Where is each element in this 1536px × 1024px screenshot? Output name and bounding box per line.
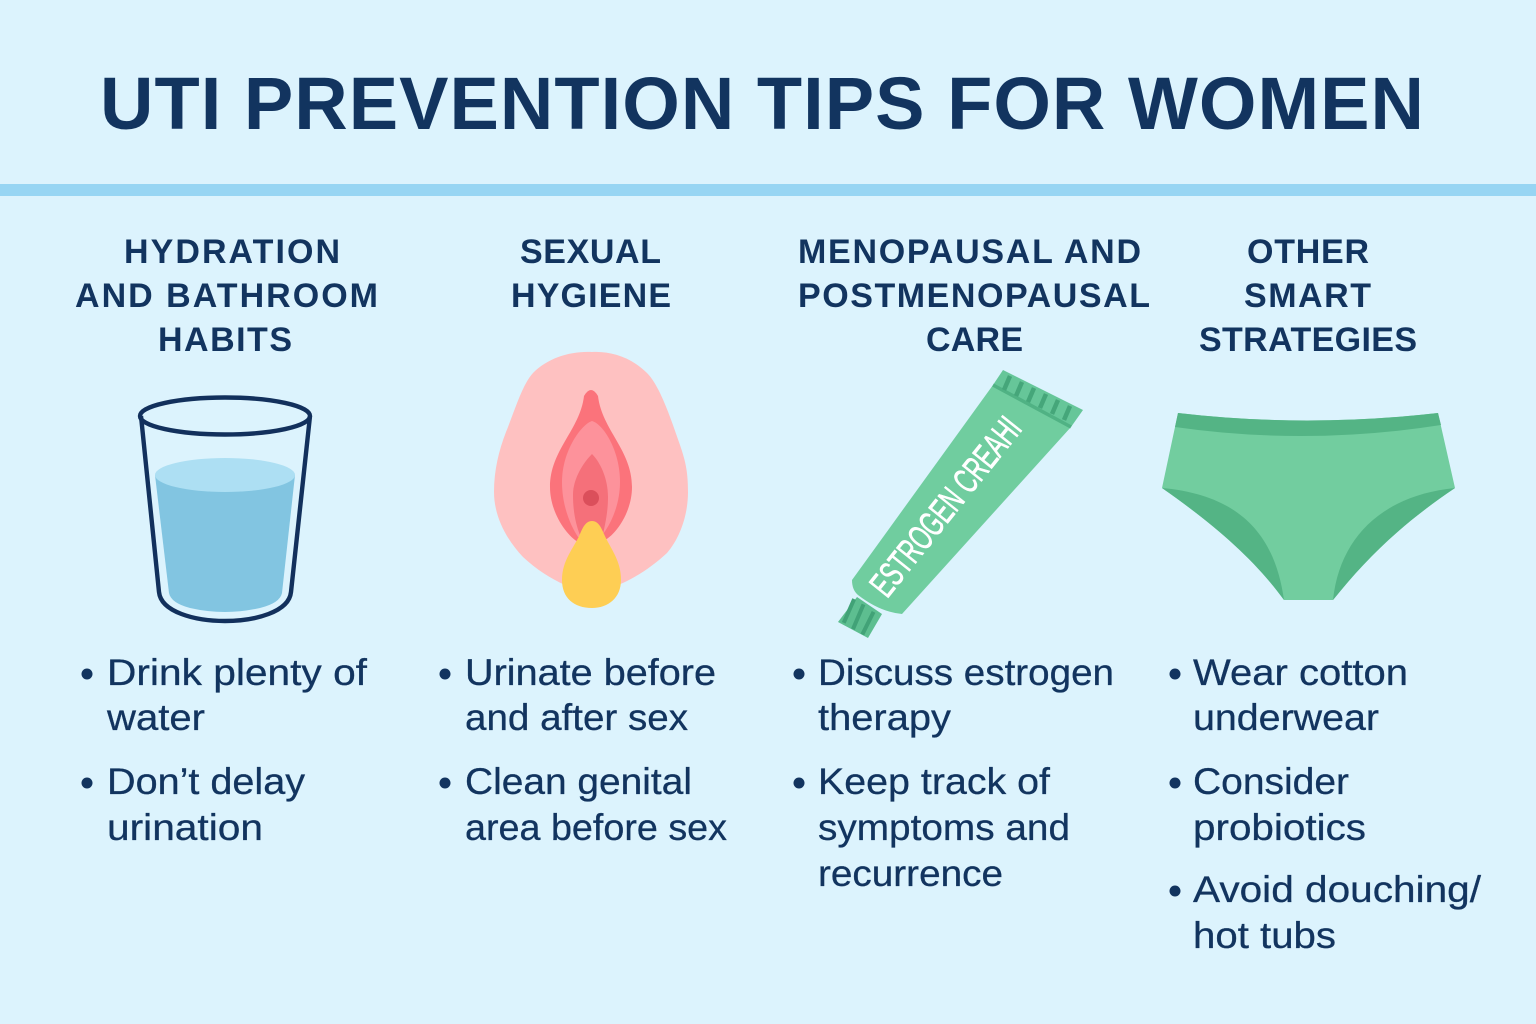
heading: hydration: AND BATHROOM bbox=[75, 277, 378, 315]
bullet list: other strategies: hot tubs bbox=[1193, 915, 1336, 956]
heading: menopausal: POSTMENOPAUSAL bbox=[798, 277, 1150, 315]
bullet list: other strategies bbox=[1170, 652, 1482, 956]
icon: estrogen cream tube bbox=[838, 370, 1083, 638]
bullet list: menopausal: therapy bbox=[818, 697, 952, 738]
bullet list: other strategies: Avoid douching/ bbox=[1193, 869, 1482, 910]
bullet list: hydration bbox=[82, 652, 368, 848]
bullet list: sexual hygiene: Clean genital bbox=[465, 761, 692, 802]
bullet list: hydration: Drink plenty of bbox=[107, 652, 368, 693]
heading: other smart strategies bbox=[1199, 233, 1417, 359]
bullet list: hydration: Don’t delay bbox=[107, 761, 306, 802]
heading: hydration: HABITS bbox=[158, 321, 292, 359]
panel: other smart strategies bbox=[1162, 233, 1482, 956]
bullet list: menopausal: recurrence bbox=[818, 853, 1003, 894]
heading: menopausal: MENOPAUSAL AND bbox=[798, 233, 1141, 271]
bullet list: menopausal bbox=[794, 652, 1114, 894]
heading: other smart strategies: SMART bbox=[1244, 277, 1371, 315]
heading: other smart strategies: OTHER bbox=[1247, 233, 1369, 271]
bullet list: sexual hygiene bbox=[440, 652, 728, 848]
bullet list: hydration: water bbox=[106, 697, 205, 738]
bullet list: sexual hygiene: Urinate before bbox=[465, 652, 716, 693]
bullet list: sexual hygiene: and after sex bbox=[465, 697, 689, 738]
heading: other smart strategies: STRATEGIES bbox=[1199, 321, 1417, 359]
heading: menopausal: CARE bbox=[926, 321, 1023, 359]
heading: sexual hygiene: HYGIENE bbox=[511, 277, 671, 315]
heading: sexual hygiene bbox=[511, 233, 671, 315]
title: UTI PREVENTION TIPS FOR WOMEN bbox=[100, 62, 1424, 145]
heading: hydration bbox=[75, 233, 378, 359]
heading: hydration: HYDRATION bbox=[124, 233, 340, 271]
bullet list: menopausal: symptoms and bbox=[818, 807, 1070, 848]
bullet list: other strategies: probiotics bbox=[1193, 807, 1366, 848]
bullet list: sexual hygiene: area before sex bbox=[465, 807, 728, 848]
icon: glass of water bbox=[140, 398, 310, 621]
bullet list: other strategies: underwear bbox=[1193, 697, 1379, 738]
panel: hydration and bathroom habits bbox=[75, 233, 378, 848]
panel: sexual hygiene bbox=[440, 233, 728, 848]
panel: menopausal and postmenopausal care bbox=[794, 233, 1150, 894]
icon: estrogen cream tube: ESTROGEN CREAHI bbox=[861, 408, 1030, 604]
bullet list: menopausal: Discuss estrogen bbox=[818, 652, 1114, 693]
icon: anatomy illustration with drop bbox=[494, 352, 688, 608]
bullet list: other strategies: Wear cotton bbox=[1193, 652, 1408, 693]
bullet list: other strategies: Consider bbox=[1193, 761, 1349, 802]
bullet list: menopausal: Keep track of bbox=[818, 761, 1051, 802]
heading: sexual hygiene: SEXUAL bbox=[520, 233, 661, 271]
icon: cotton underwear bbox=[1162, 413, 1455, 600]
heading: menopausal bbox=[798, 233, 1150, 359]
bullet list: hydration: urination bbox=[107, 807, 263, 848]
